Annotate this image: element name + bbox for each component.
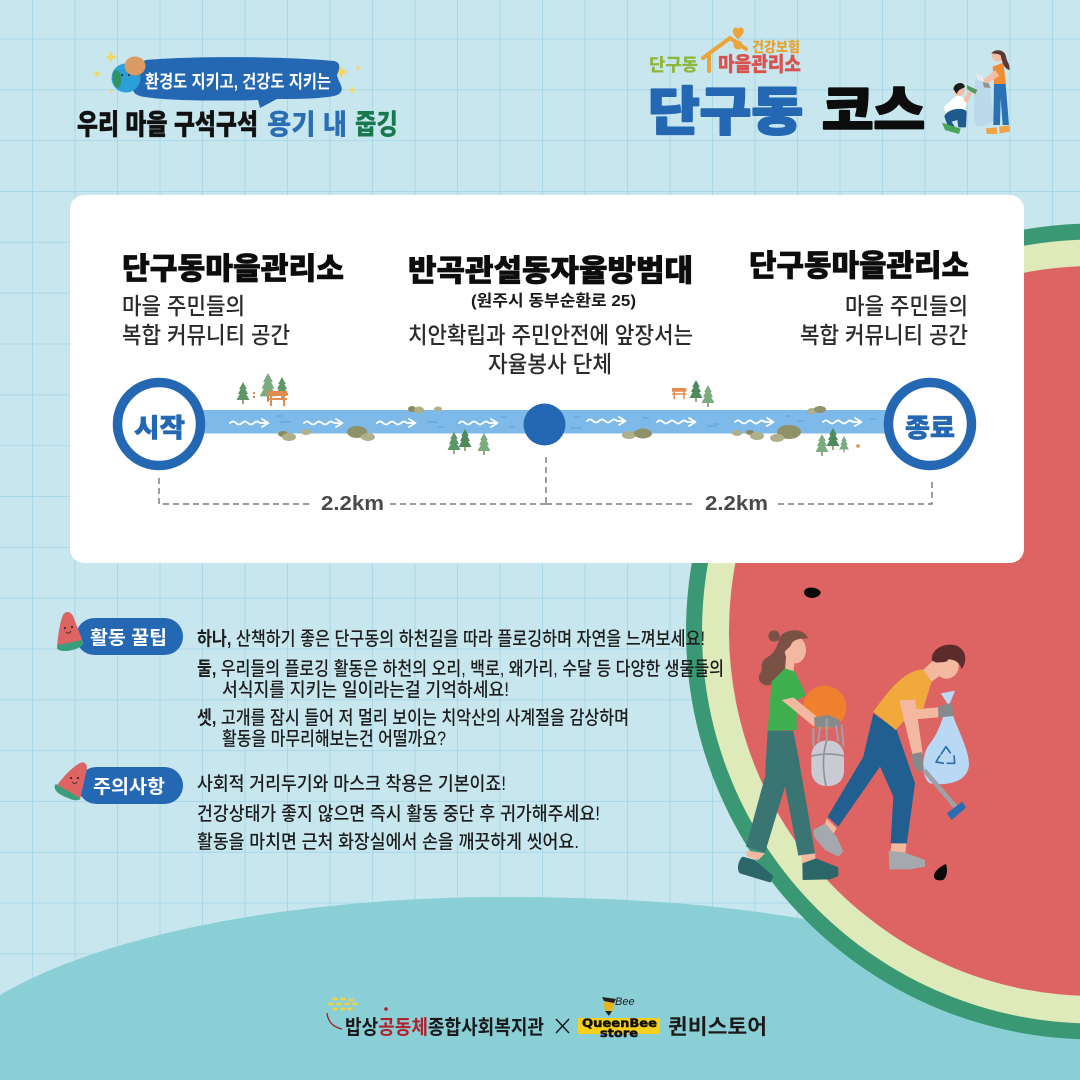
middle place description: 치안확립과 주민안전에 앞장서는	[408, 322, 693, 348]
panel: course map	[70, 195, 1024, 563]
multiplication sign	[556, 1019, 569, 1033]
watermelon slice background	[686, 224, 1080, 1040]
logo: queen bee store: store	[600, 1026, 638, 1040]
tips text: 둘, 우리들의 플로깅 활동은 하천의 오리, 백로, 왜가리, 수달 등 다양한 생물들의	[197, 658, 724, 680]
icon: watermelon	[57, 612, 83, 651]
tips text: 활동을 마무리해보는건 어떨까요?	[222, 728, 446, 750]
start place description: 마을 주민들의	[122, 293, 245, 319]
middle place address: (원주시 동부순환로 25)	[471, 292, 636, 310]
distance label left: 2.2km	[321, 493, 384, 515]
woman with bag	[974, 50, 1010, 134]
start place heading: 단구동마을관리소	[122, 253, 344, 286]
man with recycling bag	[813, 645, 969, 869]
trees and benches	[236, 373, 860, 456]
brand name: 퀸비스토어	[668, 1016, 767, 1039]
distance label right: 2.2km	[705, 493, 768, 515]
bubble text: 환경도 지키고, 건강도 지키는	[145, 72, 331, 92]
title: 단구동	[648, 84, 803, 142]
title	[648, 83, 925, 142]
logo: queen bee store	[578, 996, 660, 1040]
end place description: 복합 커뮤니티 공간	[800, 322, 968, 348]
tips text: 하나, 산책하기 좋은 단구동의 하천길을 따라 플로깅하며 자연을 느껴보세요!	[197, 628, 705, 650]
logo: welfare centre	[327, 998, 544, 1039]
end place description: 마을 주민들의	[845, 293, 968, 319]
precautions text	[197, 773, 600, 853]
icon: watermelon	[55, 762, 87, 800]
tips text: 서식지를 지키는 일이라는걸 기억하세요!	[222, 679, 509, 701]
tips text	[197, 628, 724, 750]
flow arrows	[230, 417, 862, 427]
logo: queen bee store: Bee	[615, 996, 635, 1008]
footer logos	[327, 996, 767, 1040]
icon: house roof	[703, 38, 746, 71]
rocks	[278, 406, 826, 442]
badge: precautions	[55, 762, 183, 804]
label: village centre: 마을관리소	[718, 53, 801, 76]
logo: welfare centre: 밥상공동체종합사회복지관	[345, 1016, 544, 1039]
speech bubble	[133, 57, 342, 108]
icon: earth	[112, 56, 146, 92]
title: 코스	[822, 83, 925, 141]
header: campaign slogan	[77, 51, 398, 140]
icon: sparkles	[93, 51, 361, 94]
label: neighbourhood: 단구동	[649, 55, 698, 75]
icon: recycling symbol	[936, 747, 955, 763]
middle place description	[408, 322, 693, 377]
illustration: small volunteers	[942, 50, 1010, 134]
badge: activity tips	[57, 612, 183, 655]
start marker: 시작	[134, 413, 185, 443]
icon: heart	[733, 27, 744, 39]
tips text: 셋, 고개를 잠시 들어 저 멀리 보이는 치악산의 사계절을 감상하며	[197, 707, 629, 729]
precautions text: 건강상태가 좋지 않으면 즉시 활동 중단 후 귀가해주세요!	[197, 803, 600, 825]
river route	[190, 373, 900, 456]
start marker	[118, 382, 200, 466]
header: village centre logo	[649, 27, 801, 76]
icon: watermelon seed bottom	[934, 864, 947, 880]
end place heading: 단구동마을관리소	[749, 250, 969, 283]
end marker: 종료	[905, 413, 955, 443]
label: health insurance: 건강보험	[752, 39, 800, 55]
woman carrying bag	[738, 630, 846, 883]
start place description: 복합 커뮤니티 공간	[122, 322, 290, 348]
man crouching	[942, 83, 977, 134]
end marker	[888, 382, 972, 466]
bottom teal hill	[0, 897, 1080, 1080]
badge: activity tips: 활동 꿀팁	[90, 627, 167, 649]
precautions text: 활동을 마치면 근처 화장실에서 손을 깨끗하게 씻어요.	[197, 831, 579, 853]
slogan green word: 줍깅	[355, 109, 398, 140]
distance brackets	[159, 457, 932, 515]
middle place heading: 반곡관설동자율방범대	[408, 255, 693, 288]
start place description	[122, 293, 290, 348]
badge: precautions: 주의사항	[93, 776, 165, 798]
icon: watermelon seed top	[804, 588, 821, 598]
slogan blue words: 용기 내	[267, 109, 347, 140]
precautions text: 사회적 거리두기와 마스크 착용은 기본이죠!	[197, 773, 506, 795]
slogan line: 우리 마을 구석구석	[77, 109, 258, 140]
logo: queen bee store: QueenBee	[582, 1016, 657, 1030]
middle place description: 자율봉사 단체	[488, 351, 612, 377]
illustration: two volunteers picking up litter	[738, 630, 969, 883]
midpoint marker	[524, 404, 566, 446]
end place description	[800, 293, 968, 348]
